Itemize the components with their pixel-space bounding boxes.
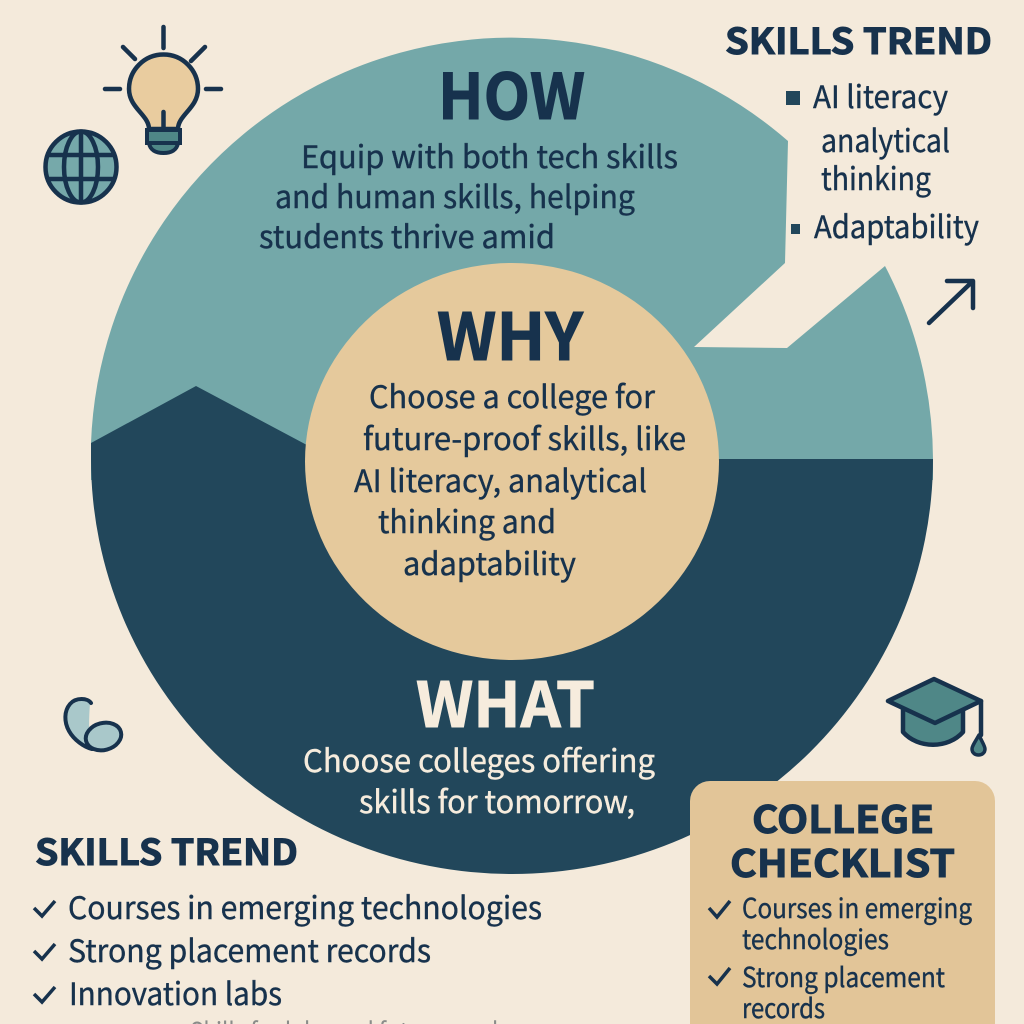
checklist: college: Courses in emerging bbox=[742, 887, 972, 926]
panel: bottom skills trend bbox=[34, 824, 542, 1014]
text: why description: adaptability bbox=[403, 539, 576, 584]
icon: globe bbox=[46, 131, 116, 203]
checklist: college bbox=[709, 887, 972, 1024]
checklist: skills trend: Strong placement records bbox=[68, 926, 431, 971]
heading: college checklist: CHECKLIST bbox=[730, 833, 955, 888]
heading: how: HOW bbox=[438, 47, 585, 138]
checklist: skills trend: Courses in emerging technologies bbox=[68, 883, 542, 928]
text: what description: Choose colleges offering bbox=[303, 736, 656, 781]
text: what description: skills for tomorrow, bbox=[359, 777, 635, 822]
heading: bottom skills trend: SKILLS TREND bbox=[35, 824, 298, 876]
text: why description bbox=[354, 372, 686, 584]
text: how description bbox=[259, 132, 678, 257]
heading: college checklist bbox=[730, 789, 955, 888]
icon: graduation cap bbox=[888, 679, 985, 755]
heading: top skills trend: SKILLS TREND bbox=[725, 13, 992, 65]
list: top skills trend: AI literacy bbox=[813, 72, 948, 117]
checklist: skills trend bbox=[34, 883, 542, 1014]
checklist: college: technologies bbox=[742, 918, 889, 957]
text: why description: Choose a college for bbox=[369, 372, 656, 417]
heading: college checklist: COLLEGE bbox=[752, 789, 934, 844]
list: top skills trend bbox=[786, 72, 979, 247]
text: how description: and human skills, helping bbox=[275, 172, 635, 217]
panel: why bbox=[305, 263, 719, 660]
text: why description: future-proof skills, like bbox=[363, 414, 686, 459]
panel: college checklist bbox=[690, 781, 995, 1024]
text: what description bbox=[303, 736, 656, 822]
icon: leaf shape bbox=[65, 699, 124, 754]
list: top skills trend: analytical bbox=[821, 116, 950, 161]
panel: what bbox=[91, 386, 933, 874]
text: why description: AI literacy, analytical bbox=[354, 456, 647, 501]
checklist: college: Strong placement bbox=[742, 956, 945, 995]
heading: why: WHY bbox=[437, 285, 584, 379]
list: top skills trend: thinking bbox=[821, 154, 931, 199]
text: why description: thinking and bbox=[378, 497, 556, 542]
panel: how bbox=[91, 38, 933, 480]
list: top skills trend: Adaptability bbox=[814, 202, 979, 247]
text: how description: Equip with both tech skills bbox=[301, 132, 678, 177]
heading: what: WHAT bbox=[416, 655, 595, 745]
text: how description: students thrive amid bbox=[259, 212, 555, 257]
icon: light bulb bbox=[105, 27, 221, 153]
icon: trend arrow bbox=[929, 281, 973, 323]
checklist: skills trend: Innovation labs bbox=[69, 969, 282, 1014]
